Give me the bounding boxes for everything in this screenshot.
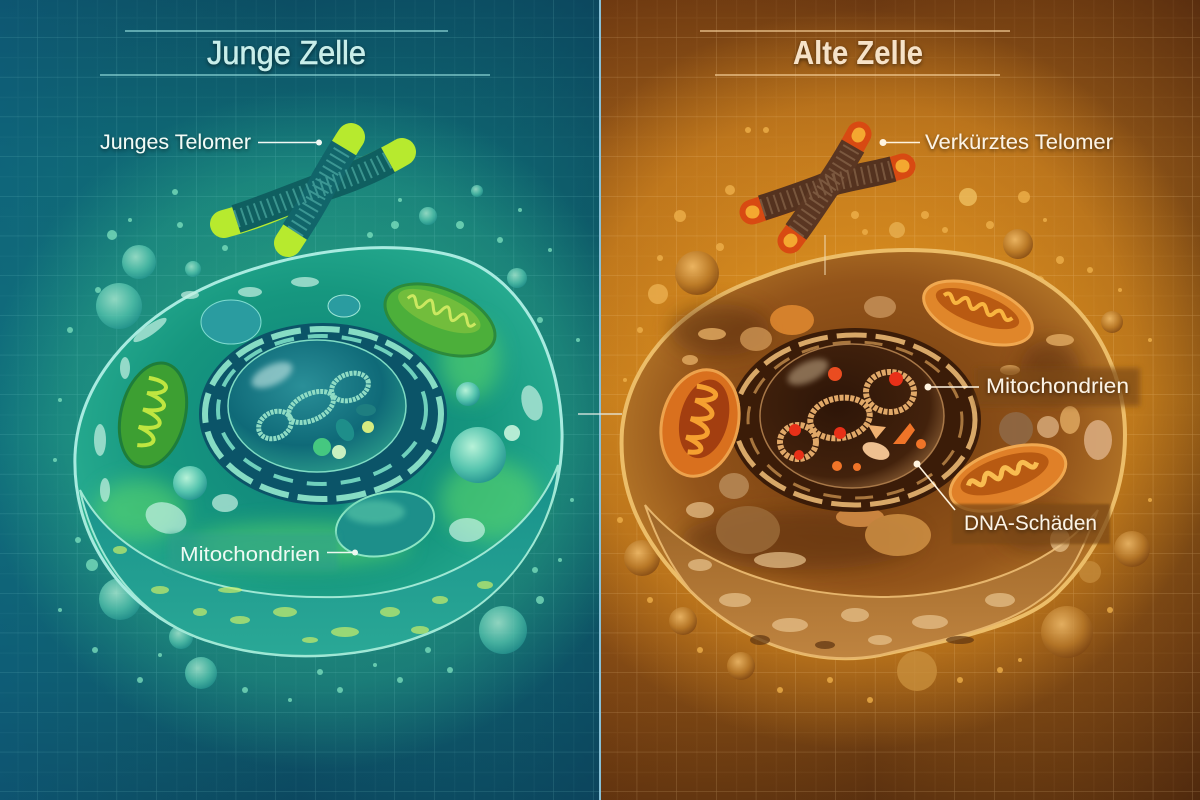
label: DNA-Schäden (914, 460, 1110, 544)
mitochondrion: top right (375, 270, 505, 370)
organelle vesicles (173, 295, 520, 500)
label: Mitochondrien (young): Mitochondrien (180, 543, 320, 566)
title: Alte Zelle: Alte Zelle (793, 34, 923, 71)
membrane vesicles (94, 277, 546, 542)
DNA helix (254, 368, 372, 444)
cytoplasm green glow (95, 320, 540, 567)
cell body (75, 248, 562, 656)
label: Mitochondrien (old): Mitochondrien (986, 375, 1129, 398)
nuclear envelope (729, 328, 981, 512)
lower wall spots (113, 546, 493, 643)
panel: old cell background (600, 0, 1200, 800)
chromosome: young (224, 137, 402, 243)
label: Mitochondrien (old) (924, 368, 1140, 406)
label: Junges Telomer: Junges Telomer (100, 131, 251, 154)
center divider (599, 0, 601, 800)
chromosome: old (752, 134, 903, 241)
particles: young cell surroundings (53, 185, 580, 702)
title: Junge Zelle: Junge Zelle (207, 34, 366, 71)
arrow: connector between cells (578, 413, 622, 415)
label: Mitochondrien (young) (168, 533, 358, 571)
DNA red breaks (789, 372, 903, 460)
nucleus (228, 340, 406, 472)
title: Junge Zelle (100, 31, 490, 75)
cell body (622, 250, 1125, 658)
mitochondrion: left (109, 356, 197, 474)
title: Alte Zelle (700, 31, 1010, 75)
nuclear envelope (199, 323, 447, 505)
cytoplasm dark patches (670, 304, 1080, 570)
panel: young cell background (0, 0, 600, 800)
cytoplasm blotches (682, 296, 1112, 556)
label: Junges Telomer (100, 131, 322, 154)
particles: old cell surroundings (617, 127, 1152, 703)
cell: young cell (75, 248, 562, 656)
connector: telomere to cell (824, 235, 826, 275)
label: DNA-Schäden: DNA-Schäden (964, 511, 1097, 535)
DNA damage fragments (828, 367, 926, 471)
mitochondrion: left (650, 361, 750, 485)
cell: old cell (622, 250, 1125, 658)
nucleus highlight (784, 354, 832, 390)
nucleus highlights (248, 357, 376, 459)
label: Verkürztes Telomer: Verkürztes Telomer (925, 130, 1113, 154)
lower wall (80, 465, 558, 656)
nucleus (760, 344, 944, 488)
lower wall (645, 505, 1098, 658)
lower wall blotches (686, 502, 1070, 649)
DNA helix damaged (780, 372, 914, 459)
mitochondrion: top right (915, 268, 1041, 358)
mitochondrion: labelled (329, 482, 441, 566)
mitochondrion: lower right (942, 432, 1074, 524)
